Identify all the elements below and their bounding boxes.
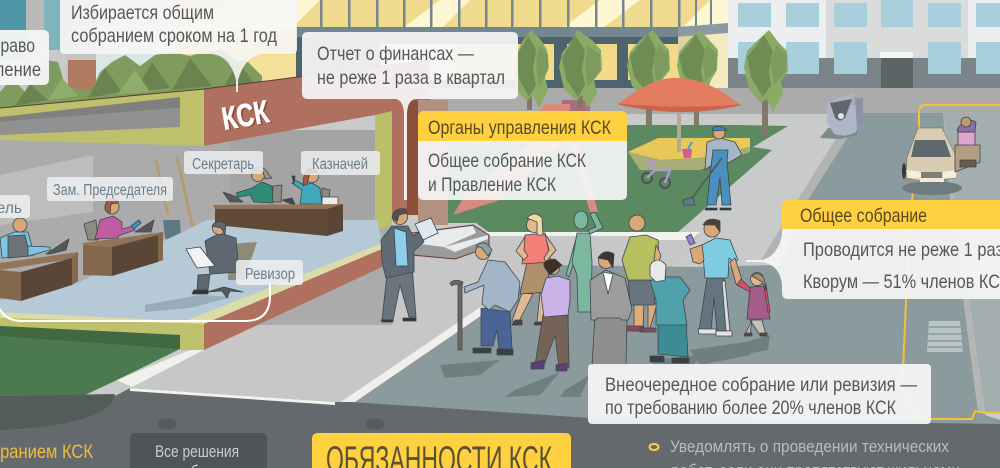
white apartment building: [728, 0, 1000, 89]
heading: duties of KSK: [312, 433, 571, 468]
row of trees: [514, 30, 788, 135]
building base and planter: [0, 249, 382, 396]
gardener with trimmer: [683, 126, 742, 210]
callout: extraordinary meeting: Внеочередное собрание или ревизия —: [605, 374, 917, 396]
callout: extraordinary meeting: [588, 364, 931, 424]
road surface: [338, 113, 1000, 426]
callout: elected for one year: собранием сроком на 1 год: [71, 25, 278, 47]
person by car: [955, 117, 980, 172]
callout: financial report: [302, 32, 518, 200]
box: all decisions: [130, 433, 267, 468]
playground slide: [453, 100, 598, 215]
label: treasurer: [301, 151, 380, 175]
box: all decisions: Все решения: [155, 442, 239, 461]
parking marking: [903, 105, 1000, 419]
KSK sign: КСК: [221, 94, 274, 138]
callout: governing bodies: Общее собрание КСК: [428, 150, 587, 172]
callout: governing bodies: Органы управления КСК: [428, 117, 612, 139]
woman in lilac blouse: [531, 259, 570, 371]
callout: governing bodies: [418, 111, 627, 200]
list item: notify about technical works: Уведомлять о проведении технических: [670, 437, 949, 456]
office floor: [0, 220, 382, 324]
lawn: [448, 115, 788, 240]
car: [902, 128, 962, 195]
front dark strip: [0, 388, 1000, 468]
auditor on chair: [186, 221, 257, 298]
man with phone: [686, 219, 742, 336]
label: auditor: Ревизор: [245, 266, 295, 283]
desk two: [83, 232, 163, 276]
callout: elected for one year: Избирается общим: [71, 2, 214, 24]
front steps: [412, 225, 489, 259]
people shadows: [440, 335, 770, 397]
man in olive shirt: [622, 215, 661, 332]
callout: extraordinary meeting: по требованию более 20% членов КСК: [605, 397, 897, 419]
callout: financial report: не реже 1 раза в квартал: [317, 67, 505, 89]
chairman at desk: [0, 218, 69, 258]
desks and office staff: [0, 167, 343, 301]
woman in red top: [512, 214, 556, 325]
callout: financial report: Отчет о финансах —: [317, 43, 474, 65]
icon: trash bin: [820, 93, 863, 139]
sidewalk and courtyard ground: [130, 88, 1000, 418]
callout: general meeting: Общее собрание: [800, 205, 927, 227]
desk three: [213, 204, 343, 236]
label: secretary: [184, 151, 263, 174]
deputy chair at desk: [84, 199, 154, 240]
label: chairman: [0, 195, 30, 218]
glass building frame: [296, 0, 728, 37]
label: deputy chairman: [47, 177, 173, 201]
office building facade: [0, 60, 448, 325]
hedge behind the roof: [0, 50, 262, 110]
callout: elected for one year: [60, 0, 297, 92]
label: auditor: [236, 260, 303, 285]
man in grey suit: [590, 252, 632, 366]
toy bucket: [682, 142, 692, 158]
glass building lower storey: [296, 33, 728, 89]
old man with cane: [450, 243, 520, 355]
label: deputy chairman: Зам. Председателя: [53, 182, 167, 199]
old woman in teal coat: [650, 260, 690, 363]
label: secretary: Секретарь: [192, 156, 254, 173]
presenter with document: [381, 209, 438, 322]
garden tools on the wall: [156, 157, 205, 243]
callout: governing bodies: и Правление КСК: [428, 174, 557, 196]
list item: notify about technical works: [650, 437, 960, 468]
toy bicycle: [642, 162, 670, 188]
label: treasurer: Казначей: [312, 156, 368, 173]
callout: membership right fragment: [0, 30, 49, 85]
playground: umbrella and sandbox: [618, 78, 750, 170]
alien: [566, 211, 603, 312]
girl in pink dress: [737, 272, 770, 336]
KSK sign: КСК: [219, 93, 272, 137]
desk one: [0, 252, 78, 301]
storm drain: [927, 321, 963, 352]
label: auditor line: [0, 284, 270, 321]
secretary and treasurer: [223, 167, 338, 206]
callout: general meeting: [746, 200, 1000, 299]
crowd of residents: [450, 211, 770, 371]
